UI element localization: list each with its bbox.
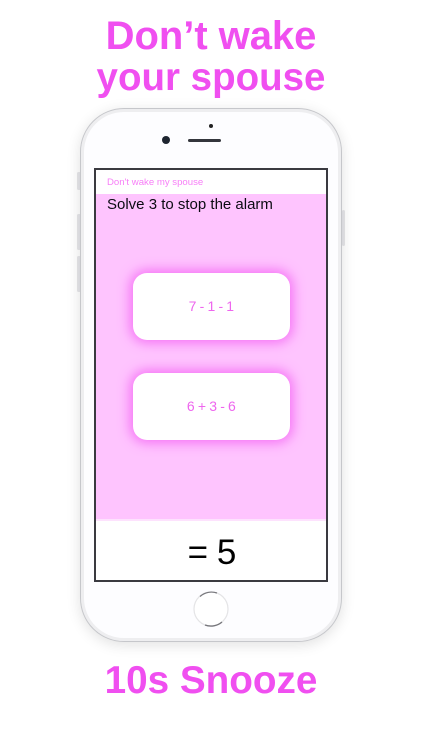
- answer: = 5: [188, 533, 236, 572]
- answer card 2: [133, 373, 290, 440]
- speaker: [188, 139, 221, 142]
- app screen: [94, 168, 328, 582]
- app header label: Don't wake my spouse: [107, 177, 203, 188]
- home button: [194, 592, 228, 627]
- phone side buttons: [77, 172, 345, 292]
- answer card 2: 6 + 3 - 6: [187, 398, 236, 414]
- sensor dot: [209, 124, 213, 128]
- answer card 1: [133, 273, 290, 340]
- answer card 1: 7 - 1 - 1: [189, 298, 234, 314]
- camera: [162, 136, 170, 144]
- footer caption: 10s Snooze: [105, 659, 317, 702]
- pink question panel: [96, 194, 328, 521]
- prompt: Solve 3 to stop the alarm: [107, 196, 273, 213]
- title: your spouse: [97, 56, 325, 99]
- title: Don’t wake: [106, 14, 316, 58]
- phone mockup: [76, 107, 346, 649]
- phone body: [80, 108, 342, 642]
- title: [96, 14, 325, 99]
